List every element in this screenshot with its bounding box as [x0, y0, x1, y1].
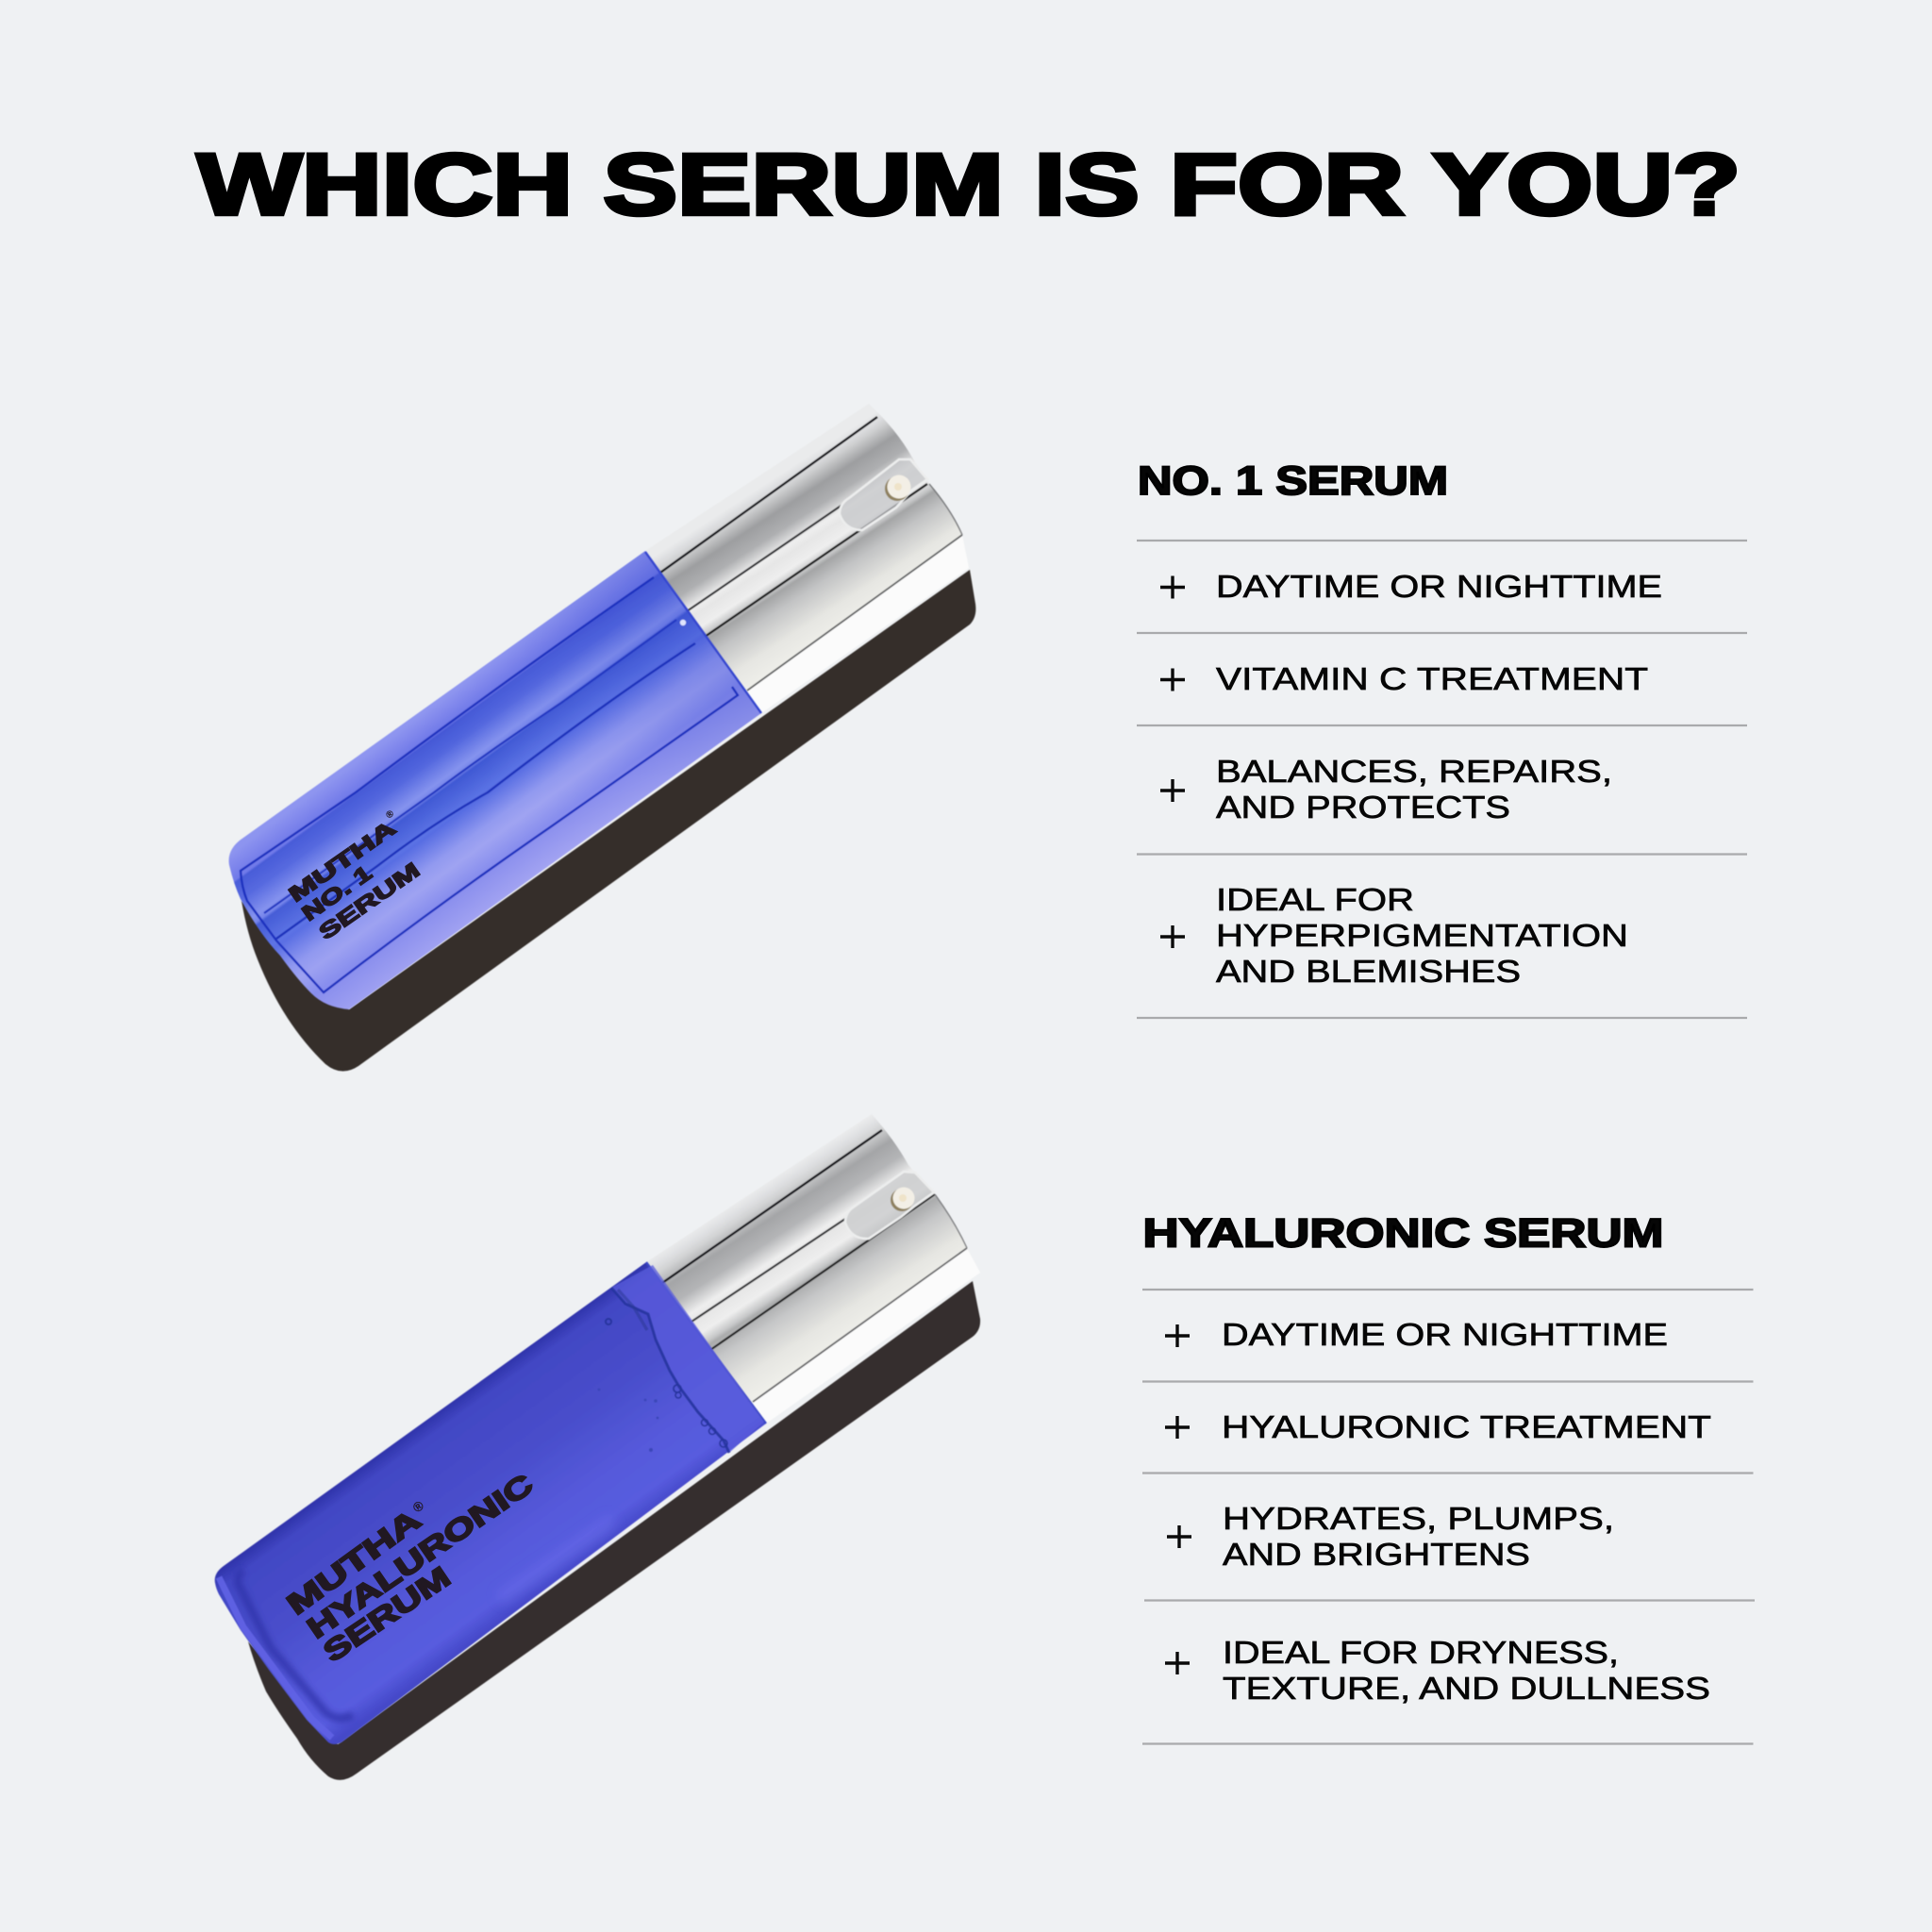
dispenser slot [845, 1172, 934, 1239]
bottle label: mutha hyaluronic serum: MUTHA [281, 1503, 426, 1622]
dispenser button [891, 1187, 915, 1211]
silver pump cap [646, 1114, 980, 1424]
panel: hyaluronic serum bottle [215, 1114, 980, 1780]
heading: no. 1 serum: NO. 1 SERUM [1138, 458, 1448, 504]
benefit: vitamin c treatment: VITAMIN C TREATMENT [1216, 662, 1648, 697]
bottle label: mutha no.1 serum: NO. 1 [298, 860, 376, 925]
bottle label: mutha hyaluronic serum: HYALURONIC [301, 1467, 539, 1645]
bottle label: mutha no.1 serum: ® [384, 808, 396, 821]
bottle label: mutha no.1 serum: SERUM [315, 858, 424, 944]
bottle label: mutha no.1 serum: MUTHA [285, 816, 400, 907]
benefit: ideal for hyperpigmentation and blemishes: AND BLEMISHES [1216, 955, 1521, 990]
benefit: ideal for dryness, texture, and dullness: TEXTURE, AND DULLNESS [1223, 1672, 1710, 1707]
highlight [500, 1521, 613, 1599]
bottle label: mutha hyaluronic serum: SERUM [317, 1560, 457, 1669]
bottle shadow [242, 570, 975, 1072]
benefit: hyaluronic treatment: HYALURONIC TREATMENT [1222, 1410, 1711, 1445]
benefit: hydrates, plumps, and brightens [1167, 1502, 1614, 1573]
benefit: daytime or nighttime: DAYTIME OR NIGHTTIME [1216, 570, 1662, 605]
liquid line and bubbles [598, 1265, 764, 1453]
bottle shadow [248, 1281, 980, 1780]
benefit: balances, repairs, and protects: BALANCES, REPAIRS, [1216, 755, 1612, 790]
benefit: ideal for hyperpigmentation and blemishes [1160, 883, 1628, 990]
benefit: ideal for dryness, texture, and dullness [1165, 1636, 1710, 1707]
bottle label: mutha no.1 serum [285, 808, 424, 944]
dispenser button [885, 475, 911, 501]
benefit: balances, repairs, and protects: AND PROTECTS [1216, 791, 1510, 825]
silver pump cap [645, 404, 969, 713]
title: WHICH SERUM IS FOR YOU? [197, 137, 1740, 233]
blue bottle body [215, 1262, 766, 1744]
dispenser slot [840, 459, 927, 530]
blue bottle body [229, 551, 761, 1009]
panel: hyaluronic serum details [1142, 1211, 1755, 1743]
benefit: daytime or nighttime: DAYTIME OR NIGHTTIME [1222, 1318, 1668, 1353]
benefit: hydrates, plumps, and brightens: HYDRATES, PLUMPS, [1223, 1502, 1614, 1537]
benefit: balances, repairs, and protects [1160, 755, 1612, 825]
panel: no. 1 serum details [1137, 458, 1747, 1018]
heading: hyaluronic serum: HYALURONIC SERUM [1143, 1211, 1664, 1257]
bottle label: mutha hyaluronic serum [281, 1467, 539, 1669]
inner glass rim [238, 1571, 353, 1718]
panel: no. 1 serum bottle [229, 404, 975, 1072]
benefit: ideal for hyperpigmentation and blemishes: HYPERPIGMENTATION [1216, 919, 1628, 954]
benefit: ideal for dryness, texture, and dullness: IDEAL FOR DRYNESS, [1223, 1636, 1619, 1671]
benefit: ideal for hyperpigmentation and blemishes: IDEAL FOR [1216, 883, 1414, 918]
bottle label: mutha hyaluronic serum: ® [409, 1497, 427, 1515]
benefit: hydrates, plumps, and brightens: AND BRIGHTENS [1223, 1538, 1530, 1573]
